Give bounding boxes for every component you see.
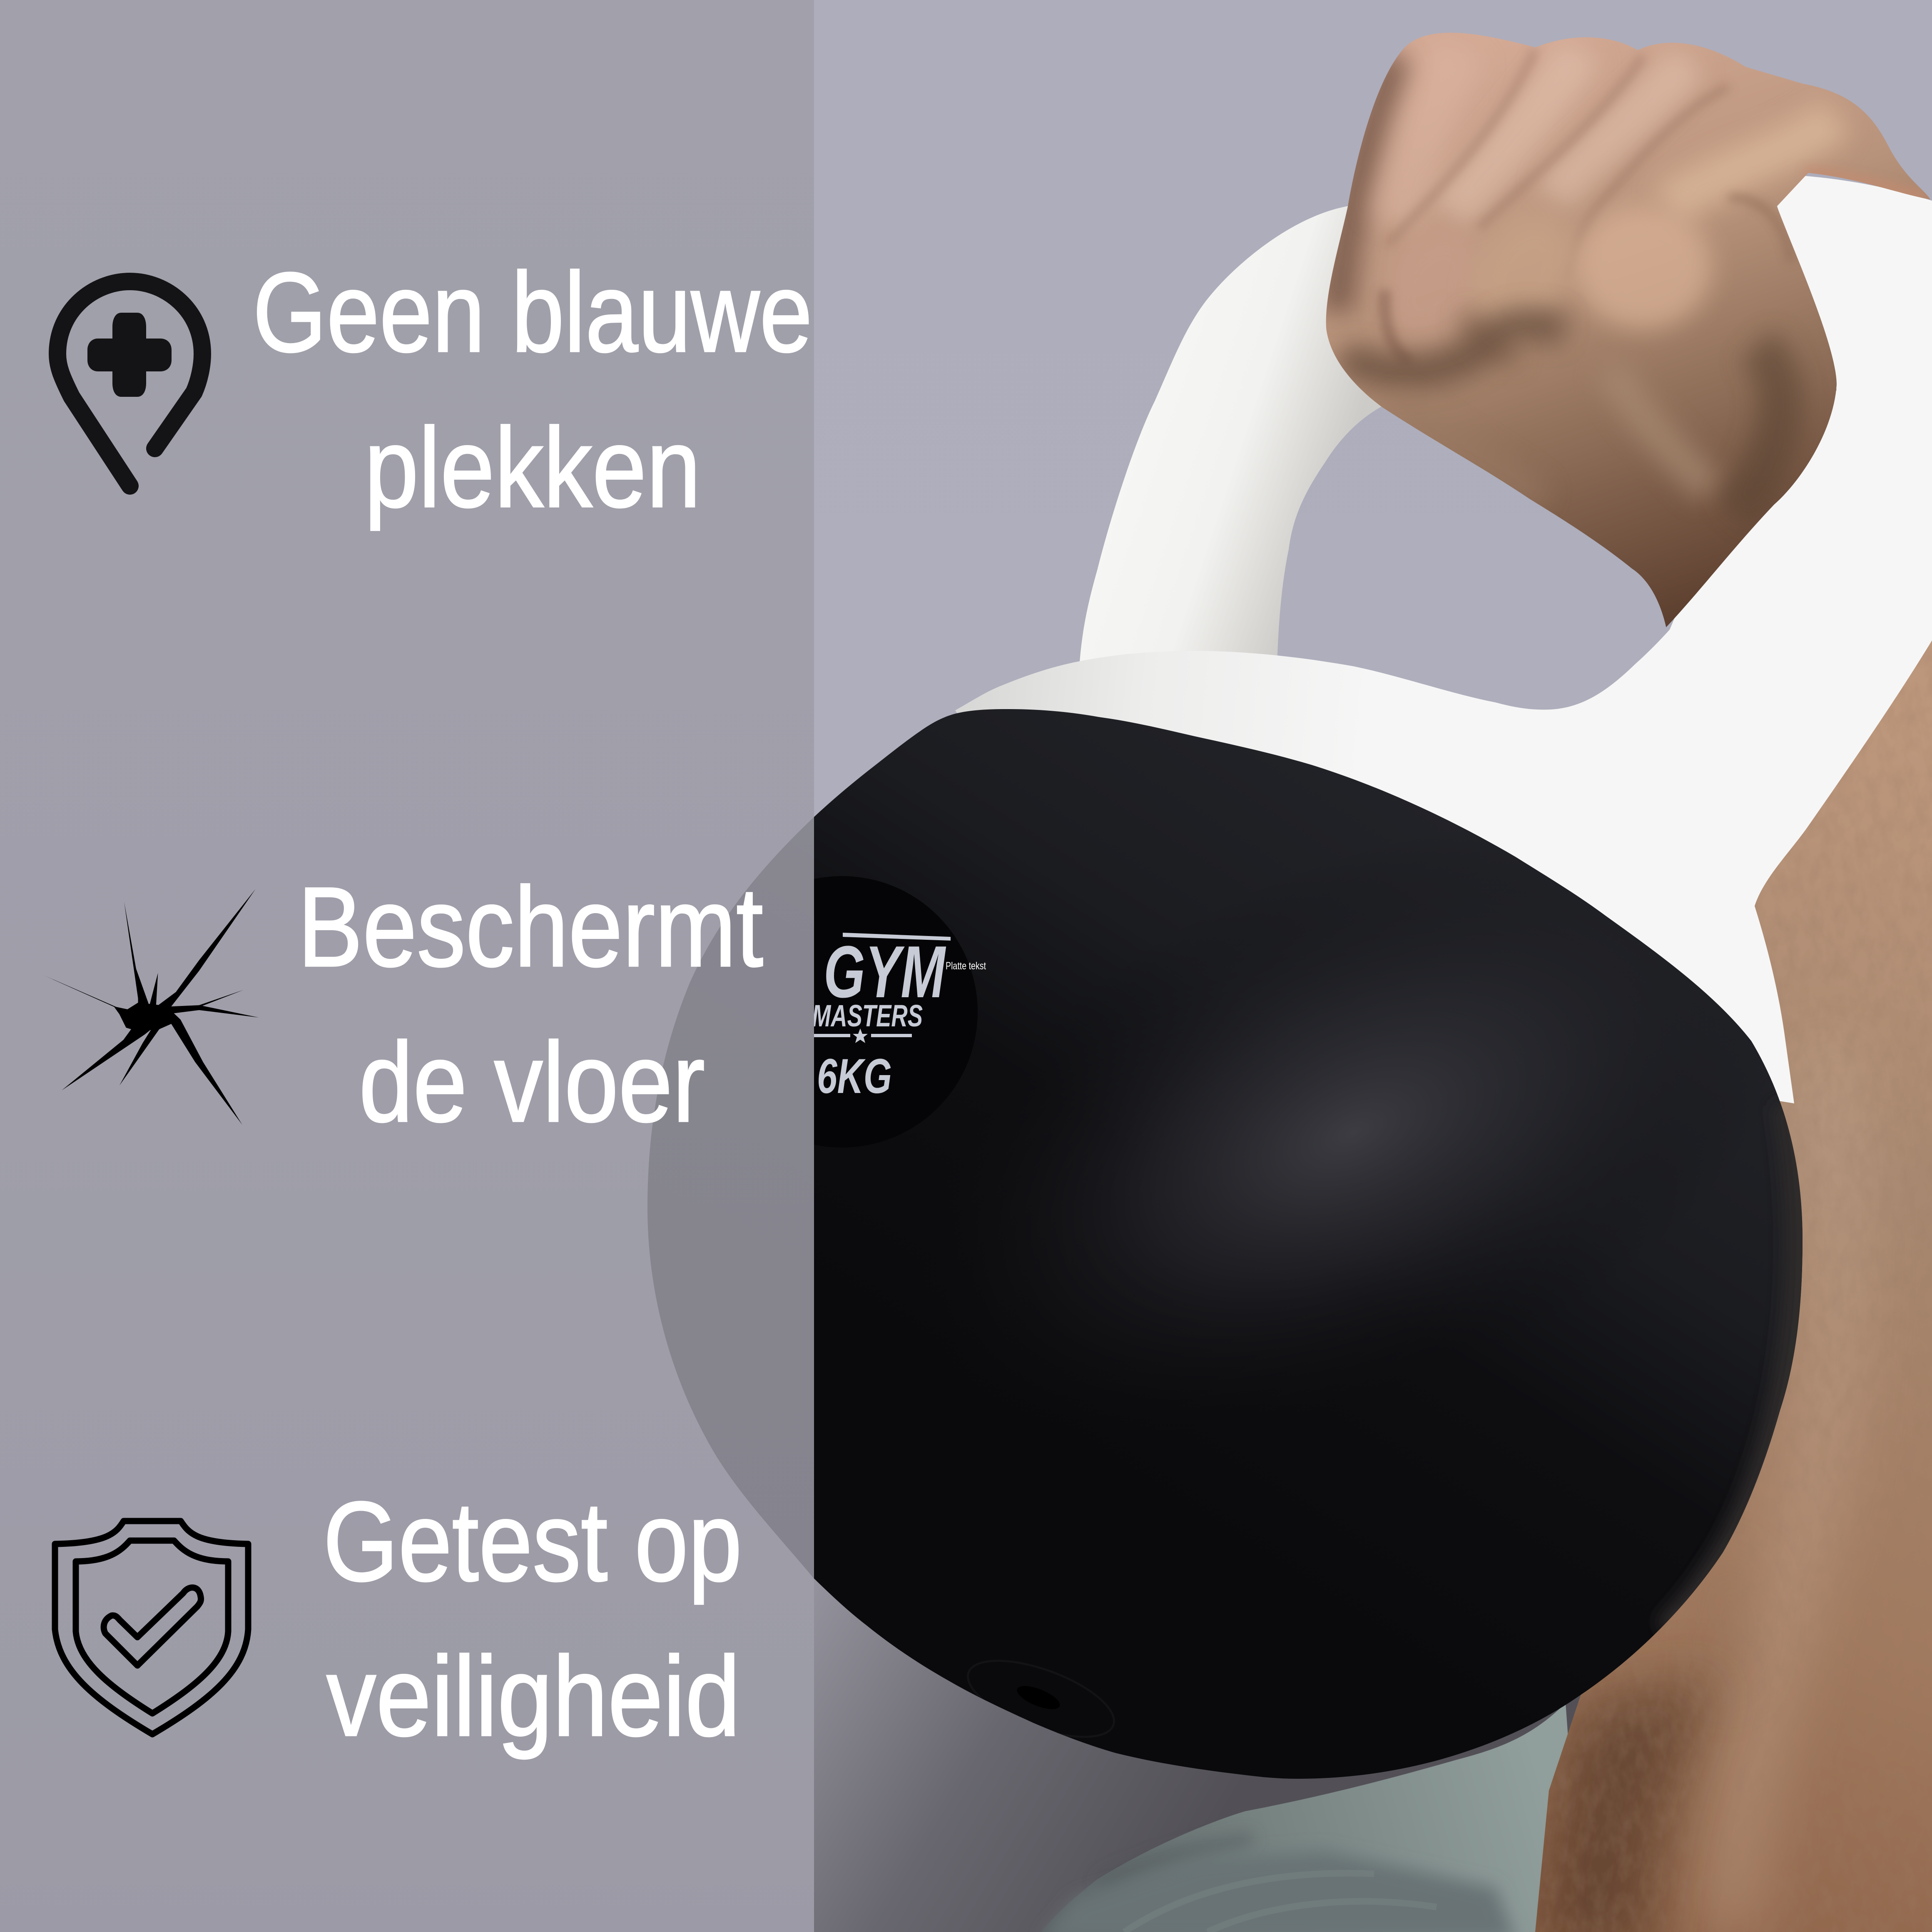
left translucent panel bbox=[0, 0, 814, 1932]
logo: gym masters 6kg: 6KG bbox=[817, 1049, 892, 1104]
photo: kettlebell handle left side bbox=[1080, 206, 1387, 666]
logo: gym masters 6kg: GYM bbox=[824, 931, 946, 1013]
caption: platte tekst: Platte tekst bbox=[946, 960, 986, 972]
icon: floor crack bbox=[43, 889, 259, 1125]
icon: safety shield with check bbox=[55, 1521, 248, 1734]
heading: getest op veiligheid: Getest op bbox=[323, 1478, 742, 1606]
heading: beschermt de vloer: de vloer bbox=[359, 1019, 705, 1145]
photo: kettlebell white body and right handle bbox=[955, 176, 1932, 1103]
photo: shadow on backdrop under ball bbox=[814, 1574, 1605, 1932]
logo: gym masters 6kg bbox=[812, 931, 951, 1104]
photo: hand gripping handle bbox=[1326, 32, 1930, 627]
photo: forearm bbox=[1535, 640, 1932, 1932]
heading: geen blauwe plekken bbox=[253, 249, 812, 531]
logo: dark disc bbox=[706, 876, 978, 1148]
heading: geen blauwe plekken: plekken bbox=[364, 404, 701, 531]
logo: gym masters 6kg: MASTERS bbox=[812, 998, 923, 1033]
heading: geen blauwe plekken: Geen blauwe bbox=[253, 249, 812, 376]
heading: getest op veiligheid: veiligheid bbox=[326, 1633, 740, 1760]
heading: beschermt de vloer: Beschermt bbox=[298, 864, 764, 990]
heading: beschermt de vloer bbox=[298, 864, 764, 1145]
photo: ball bottom valve bbox=[959, 1645, 1123, 1753]
photo: kettlebell black ball bbox=[647, 708, 1813, 1790]
heading: getest op veiligheid bbox=[323, 1478, 742, 1760]
photo: grey-green shirt bbox=[1041, 1703, 1582, 1932]
icon: medical location pin bbox=[57, 281, 202, 486]
